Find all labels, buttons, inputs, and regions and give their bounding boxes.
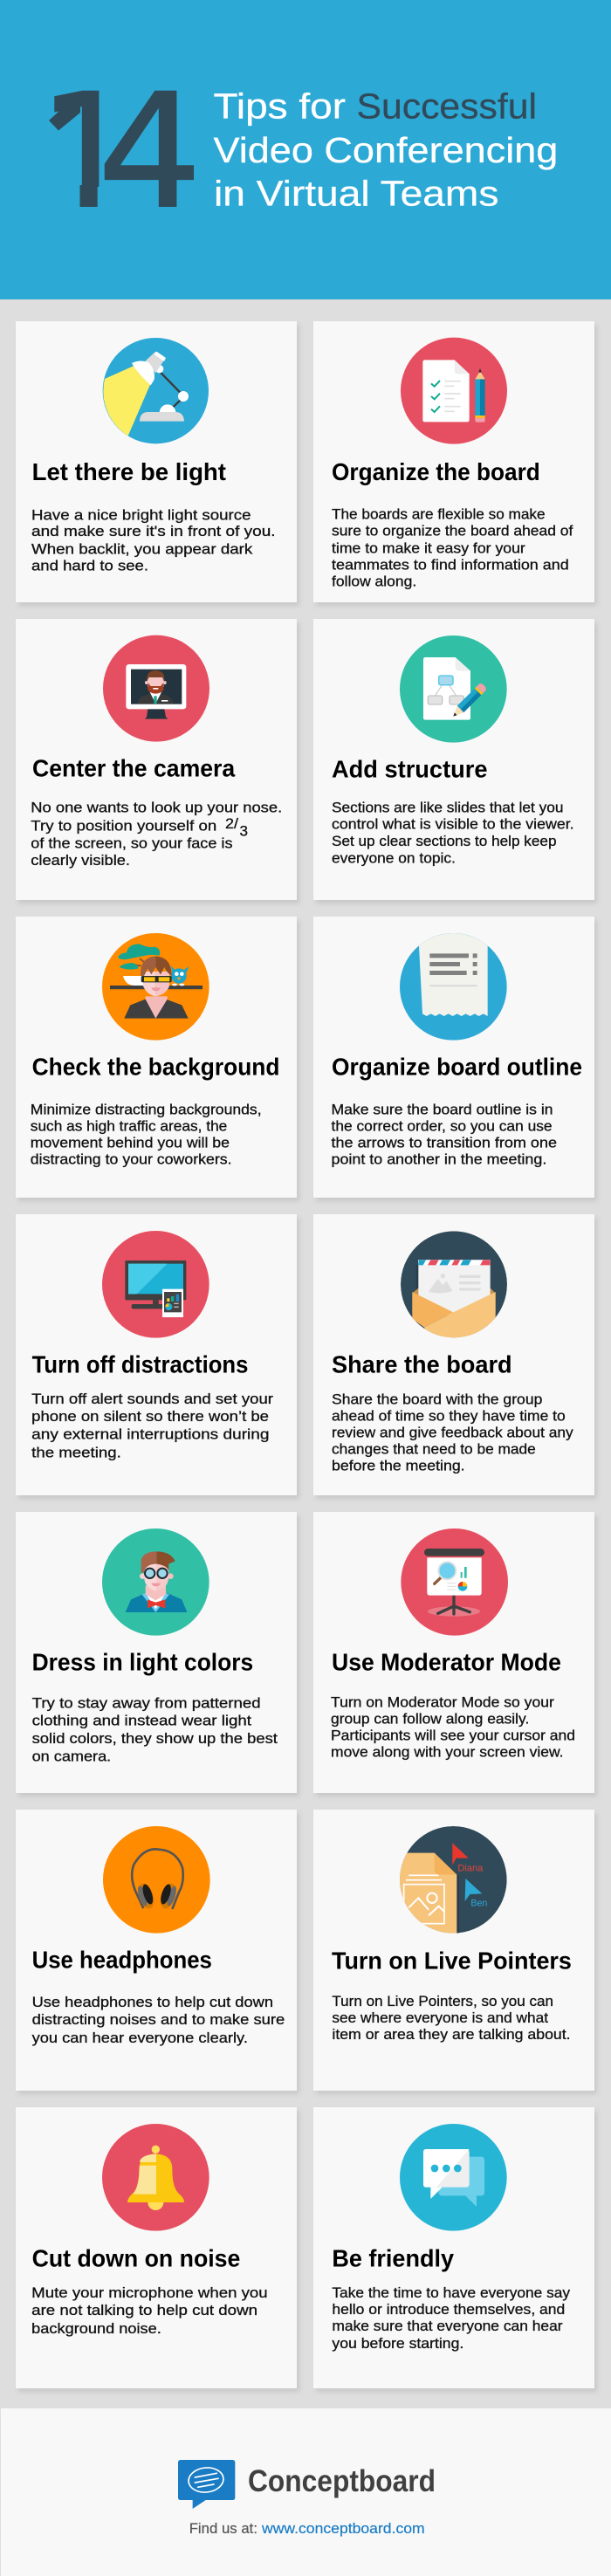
body text <box>31 1391 274 1460</box>
body text: Share the board with the group <box>332 1392 542 1408</box>
heading: Use headphones <box>32 1946 212 1973</box>
body text: time to make it easy for your <box>332 541 525 557</box>
heading: Cut down on noise <box>32 2244 240 2271</box>
body text: group can follow along easily. <box>331 1712 529 1728</box>
heading: Center the camera <box>32 755 236 782</box>
body text: any external interruptions during <box>31 1426 269 1442</box>
panel: check the background <box>16 917 297 1198</box>
body text: Participants will see your cursor and <box>331 1728 575 1743</box>
body text: movement behind you will be <box>31 1135 230 1151</box>
body text: solid colors, they show up the best <box>32 1731 278 1747</box>
body text: on camera. <box>32 1749 111 1765</box>
body text: clothing and instead wear light <box>32 1713 251 1728</box>
panel: organize the board <box>313 321 594 602</box>
body text: Make sure the board outline is in <box>332 1102 553 1117</box>
body text: you before starting. <box>332 2336 463 2352</box>
body text: distracting to your coworkers. <box>31 1152 232 1168</box>
body text: move along with your screen view. <box>331 1745 564 1761</box>
body text: ahead of time so they have time to <box>332 1408 566 1424</box>
body text: Sections are like slides that let you <box>332 800 564 815</box>
title: Tips for <box>213 86 346 126</box>
panel: turn on live pointers <box>313 1810 594 2091</box>
icon: desk lamp <box>103 338 209 443</box>
body text <box>31 2285 268 2337</box>
panel: let there be light <box>16 321 297 602</box>
body text: the correct order, so you can use <box>332 1119 553 1135</box>
body text: and make sure it's in front of you. <box>31 524 276 539</box>
icon: headphones <box>103 1826 210 1934</box>
heading: Organize board outline <box>332 1054 582 1081</box>
icon: checklist and pencil <box>401 338 507 444</box>
body text: before the meeting. <box>332 1458 465 1473</box>
title: in Virtual Teams <box>214 174 498 214</box>
body text: background noise. <box>31 2321 161 2337</box>
body text <box>31 1102 262 1168</box>
heading: Check the background <box>32 1054 279 1081</box>
body text <box>332 1994 571 2043</box>
title <box>213 86 558 214</box>
body text: Turn off alert sounds and set your <box>31 1391 274 1407</box>
body text: Turn on Moderator Mode so your <box>331 1694 554 1710</box>
body text: distracting noises and to make sure <box>32 2012 285 2028</box>
body text: make sure that everyone can hear <box>332 2318 563 2334</box>
icon: Conceptboard logo <box>178 2460 235 2509</box>
contact line <box>189 2520 425 2537</box>
big number 14: 4 <box>98 61 203 244</box>
body text: the meeting. <box>31 1445 121 1460</box>
body text: Mute your microphone when you <box>31 2285 268 2301</box>
icon: man on monitor <box>103 635 209 742</box>
body text: control what is visible to the viewer. <box>332 817 574 833</box>
body text: sure to organize the board ahead of <box>332 523 573 539</box>
body text: Take the time to have everyone say <box>332 2285 571 2301</box>
footer panel <box>1 2408 611 2576</box>
body text: The boards are flexible so make <box>332 507 546 523</box>
header banner <box>0 0 611 299</box>
body text: When backlit, you appear dark <box>31 541 253 557</box>
body text <box>332 1102 557 1168</box>
body text <box>332 800 574 866</box>
body text: you can hear everyone clearly. <box>32 2030 248 2046</box>
body text: 3 <box>239 824 248 840</box>
heading: Use Moderator Mode <box>332 1648 561 1676</box>
heading: Add structure <box>332 756 487 783</box>
panel: turn off distractions <box>16 1214 297 1495</box>
panel: organize board outline <box>313 917 594 1198</box>
heading: Turn off distractions <box>32 1350 248 1377</box>
body text: see where everyone is and what <box>332 2010 548 2026</box>
icon: person with shelf background <box>102 933 209 1041</box>
body text: the arrows to transition from one <box>332 1135 557 1151</box>
body text: Have a nice bright light source <box>31 508 251 524</box>
body text <box>32 1995 285 2046</box>
body text <box>31 508 276 574</box>
icon: envelope with letter <box>401 1231 507 1342</box>
body text: point to another in the meeting. <box>332 1152 546 1168</box>
body text: everyone on topic. <box>332 850 456 866</box>
body text: changes that need to be made <box>332 1441 536 1457</box>
body text: follow along. <box>332 574 416 589</box>
icon: document with live pointers: Diana <box>457 1863 483 1873</box>
heading: Organize the board <box>332 458 540 485</box>
body text <box>332 1392 573 1473</box>
body text: Turn on Live Pointers, so you can <box>332 1994 553 2009</box>
body text <box>31 800 282 869</box>
contact line: www.conceptboard.com <box>261 2520 425 2537</box>
panel: use moderator mode <box>313 1512 594 1793</box>
heading: Turn on Live Pointers <box>332 1947 572 1975</box>
body text <box>331 1694 575 1761</box>
heading: Let there be light <box>32 458 226 485</box>
body text: Try to stay away from patterned <box>32 1695 261 1711</box>
body text: item or area they are talking about. <box>332 2027 571 2043</box>
heading: Dress in light colors <box>32 1648 253 1676</box>
brand name: Conceptboard <box>248 2464 436 2498</box>
panel: add structure <box>313 619 594 900</box>
body text: review and give feedback about any <box>332 1425 573 1440</box>
body text: clearly visible. <box>31 853 130 869</box>
body text: 2/ <box>225 816 238 832</box>
panel: dress in light colors <box>16 1512 297 1793</box>
icon: document with live pointers: Ben <box>470 1899 487 1909</box>
icon: monitor and tablet <box>102 1231 209 1338</box>
body text: hello or introduce themselves, and <box>332 2302 565 2318</box>
panel: use headphones <box>16 1810 297 2091</box>
contact line: Find us at: <box>189 2520 257 2537</box>
body text <box>332 507 573 589</box>
body text: Try to position yourself on <box>31 818 216 834</box>
title: Successful <box>356 86 537 126</box>
body text <box>32 1695 278 1765</box>
icon: paper receipt outline <box>400 933 507 1041</box>
body text <box>332 2285 571 2352</box>
body text: Set up clear sections to help keep <box>332 834 557 849</box>
panel: cut down on noise <box>16 2107 297 2388</box>
icon: chat bubbles <box>400 2124 507 2231</box>
big number 14: 1 <box>38 61 138 244</box>
body text: of the screen, so your face is <box>31 835 232 851</box>
body text: such as high traffic areas, the <box>31 1119 227 1135</box>
icon: document with live pointers <box>399 1826 507 1934</box>
panel: be friendly <box>313 2107 594 2388</box>
icon: bell <box>102 2124 209 2231</box>
panel: center the camera <box>16 619 297 900</box>
body text: are not talking to help cut down <box>31 2303 257 2318</box>
body text: Use headphones to help cut down <box>32 1995 273 2010</box>
icon: presentation board <box>401 1528 508 1636</box>
big number 14 <box>26 61 203 244</box>
heading: Be friendly <box>332 2244 455 2271</box>
icon: man with glasses and bow tie <box>102 1528 209 1636</box>
heading: Share the board <box>332 1350 512 1377</box>
title: Video Conferencing <box>213 130 558 170</box>
body text: teammates to find information and <box>332 558 569 574</box>
body text: No one wants to look up your nose. <box>31 800 282 815</box>
icon: diagram document with pencil <box>400 635 507 743</box>
body text: phone on silent so there won’t be <box>31 1409 269 1425</box>
body text: and hard to see. <box>31 559 148 574</box>
body text: Minimize distracting backgrounds, <box>31 1102 262 1117</box>
panel: share the board <box>313 1214 594 1495</box>
